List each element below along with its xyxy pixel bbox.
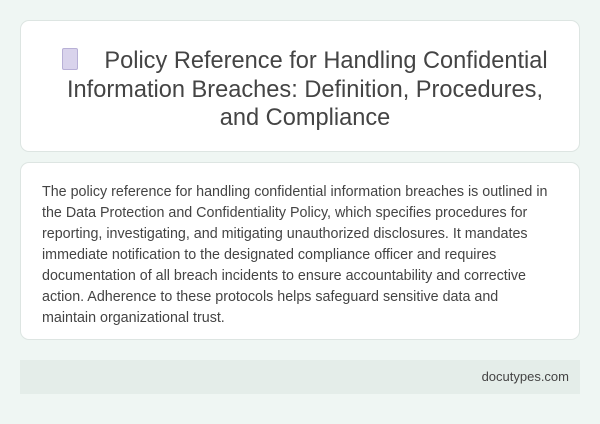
icon: document: [62, 48, 78, 70]
footer: [20, 360, 580, 394]
title card: [20, 20, 580, 152]
footer: docutypes.com: [482, 369, 569, 384]
body text card: [20, 162, 580, 340]
description text: The policy reference for handling confidential information breaches is outlined in the Data Protection and Confidentiality Policy, which specifies procedures for reporting, investigating, and mitigating unauthorized disclosures. It mandates immediate notification to the designated compliance officer and requires documentation of all breach incidents to ensure accountability and corrective action. Adherence to these protocols helps safeguard sensitive data and maintain organizational trust.: [42, 184, 547, 326]
title: Policy Reference for Handling Confidential Information Breaches: Definition, Procedures, and Compliance: [67, 48, 548, 131]
